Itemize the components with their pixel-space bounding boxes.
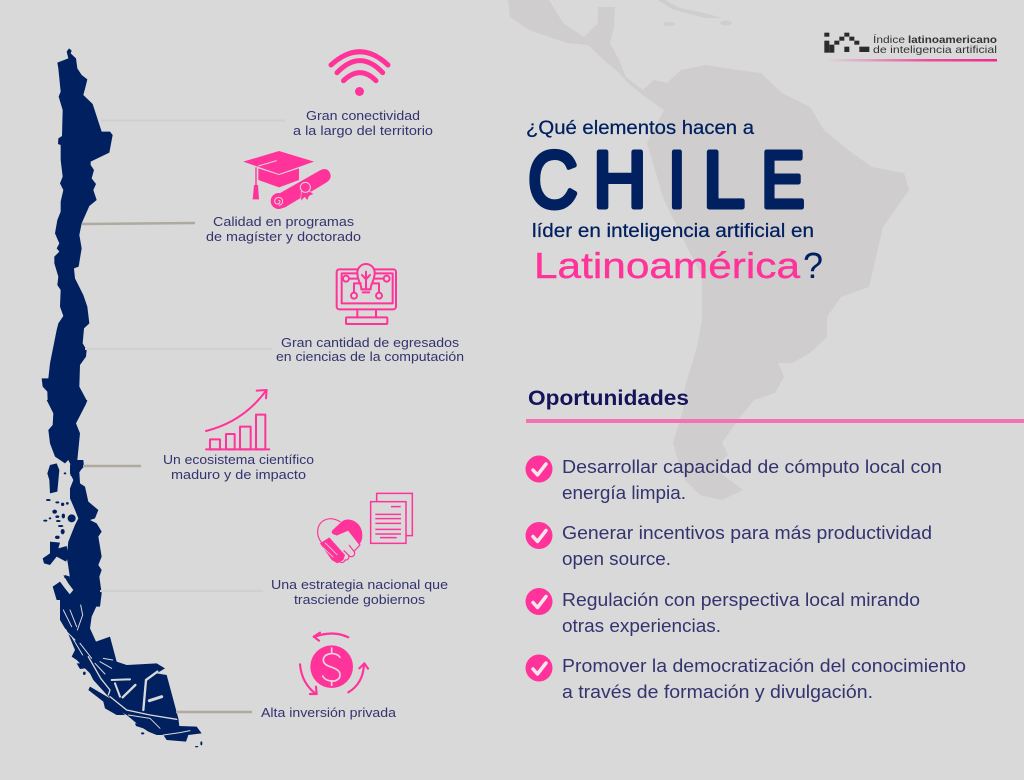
item 1: energía limpia.: [562, 483, 686, 503]
item 3: Regulación con perspectiva local mirando: [562, 590, 920, 610]
label: posgrados: de magíster y doctorado: [206, 230, 361, 244]
logo gradient underline: [827, 59, 997, 62]
item 1: Desarrollar capacidad de cómputo local con: [562, 457, 942, 477]
title: CHILE: I: [668, 135, 686, 225]
label: ecosistema: Un ecosistema científico: [163, 453, 314, 467]
icon: heart handshake and documents: [318, 493, 412, 563]
logo text: de inteligencia artificial: [873, 44, 997, 56]
item 3: [526, 588, 920, 636]
panel: posgrados: [206, 151, 361, 244]
panel: inversión privada: [261, 633, 396, 720]
item 4: a través de formación y divulgación.: [562, 682, 873, 702]
map of Chile: [42, 48, 202, 747]
title: CHILE: [528, 134, 805, 225]
item 3: otras experiencias.: [562, 616, 721, 636]
icon: wifi: [331, 52, 388, 96]
title: CHILE: H: [593, 136, 647, 225]
label: egresados: Gran cantidad de egresados: [281, 336, 459, 350]
title: Latinoamérica: ?: [803, 245, 823, 286]
heading: Oportunidades: Oportunidades: [528, 387, 689, 410]
label: conectividad: a la largo del territorio: [293, 124, 433, 138]
label: estrategia nacional: trasciende gobiernos: [294, 593, 425, 607]
label: inversión privada: Alta inversión privada: [261, 706, 396, 720]
label: egresados: en ciencias de la computación: [276, 350, 464, 364]
label: estrategia nacional: Una estrategia nacional que: [271, 578, 448, 592]
item 4: Promover la democratización del conocimiento: [562, 656, 966, 676]
logo text: latinoamericano: [908, 34, 997, 46]
icon: graduation cap and diploma: [243, 151, 331, 209]
panel: conectividad: [293, 52, 433, 138]
logo: [824, 33, 997, 62]
leader lines: [82, 120, 285, 712]
label: ecosistema: maduro y de impacto: [171, 468, 306, 482]
label: conectividad: Gran conectividad: [306, 109, 420, 123]
item 2: [526, 522, 932, 569]
title: CHILE: C: [528, 134, 578, 224]
item 2: open source.: [562, 549, 671, 569]
panel: egresados: [276, 264, 464, 364]
item 4: [526, 654, 966, 702]
icon: rising bar chart: [206, 390, 269, 449]
item 1: [526, 456, 942, 503]
title: Latinoamérica: Latinoamérica: [534, 245, 801, 286]
title line 3: líder en inteligencia artificial en: [532, 220, 814, 242]
logo mark: [824, 33, 869, 53]
heading underline: [526, 419, 1024, 423]
title: CHILE: E: [761, 135, 805, 224]
item 2: Generar incentivos para más productividad: [562, 523, 932, 543]
background map: Latin America: [508, 0, 909, 500]
icon: monitor with light bulb circuit: [337, 264, 396, 324]
panel: estrategia nacional: [271, 493, 448, 607]
title line 1: ¿Qué elementos hacen a: [526, 117, 754, 139]
title block: [526, 117, 823, 286]
panel: ecosistema: [163, 390, 314, 482]
title: CHILE: L: [703, 136, 745, 225]
icon: dollar with cycle arrows: [300, 633, 368, 694]
logo text: Índice: [873, 33, 905, 46]
label: posgrados: Calidad en programas: [213, 215, 354, 229]
panel: oportunidades: [526, 387, 1024, 702]
